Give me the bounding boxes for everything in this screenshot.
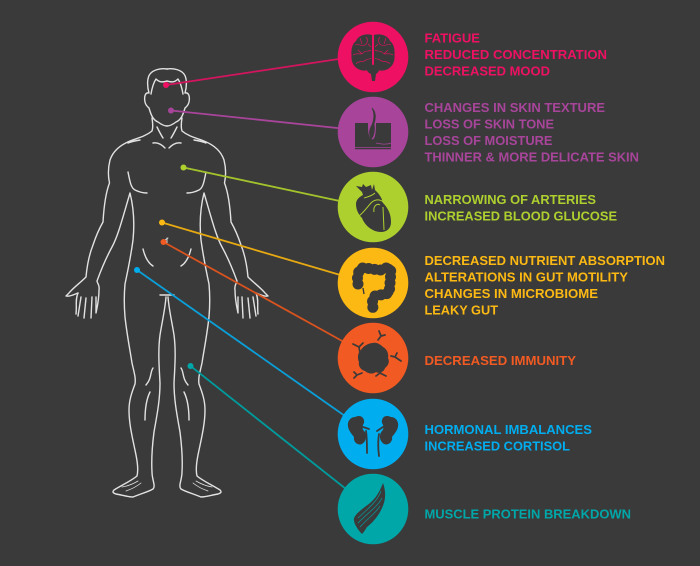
text: skin effects	[424, 100, 639, 164]
icon: muscle	[338, 474, 408, 544]
icon: brain	[338, 22, 408, 92]
human body outline	[66, 69, 268, 497]
connector: hormones	[134, 267, 345, 416]
text: skin effects: LOSS OF SKIN TONE	[424, 116, 554, 132]
text: gut effects: ALTERATIONS IN GUT MOTILITY	[424, 270, 628, 284]
icon: intestine	[338, 248, 408, 318]
connector: heart	[180, 164, 342, 202]
text: heart effects	[424, 192, 617, 224]
text: immunity effect: DECREASED IMMUNITY	[424, 353, 576, 368]
text: hormone effects	[424, 422, 592, 454]
text: hormone effects: HORMONAL IMBALANCES	[424, 422, 592, 437]
text: hormone effects: INCREASED CORTISOL	[424, 438, 570, 454]
connector: skin	[168, 108, 342, 128]
text: gut effects: DECREASED NUTRIENT ABSORPTION	[424, 253, 665, 268]
text: brain effects	[424, 30, 607, 78]
text: skin effects: THINNER & MORE DELICATE SKIN	[424, 150, 639, 164]
text: gut effects	[424, 253, 665, 318]
text: brain effects: REDUCED CONCENTRATION	[424, 47, 607, 62]
text: muscle effect: MUSCLE PROTEIN BREAKDOWN	[424, 506, 631, 522]
connector: brain	[163, 58, 342, 88]
icon: immune cell	[338, 323, 408, 393]
text: heart effects: INCREASED BLOOD GLUCOSE	[424, 208, 617, 224]
connector: immunity	[160, 239, 344, 342]
connector: muscle	[188, 363, 346, 489]
text: brain effects: DECREASED MOOD	[424, 64, 550, 78]
text: skin effects: CHANGES IN SKIN TEXTURE	[424, 100, 605, 115]
connector: gut	[159, 220, 342, 276]
text: skin effects: LOSS OF MOISTURE	[424, 133, 553, 148]
text: heart effects: NARROWING OF ARTERIES	[424, 192, 596, 207]
icon: heart	[338, 172, 408, 242]
text: gut effects: LEAKY GUT	[424, 302, 498, 318]
text: brain effects: FATIGUE	[424, 30, 480, 46]
icon: kidneys	[338, 399, 408, 469]
text: gut effects: CHANGES IN MICROBIOME	[424, 286, 598, 301]
icon: skin	[338, 97, 408, 167]
